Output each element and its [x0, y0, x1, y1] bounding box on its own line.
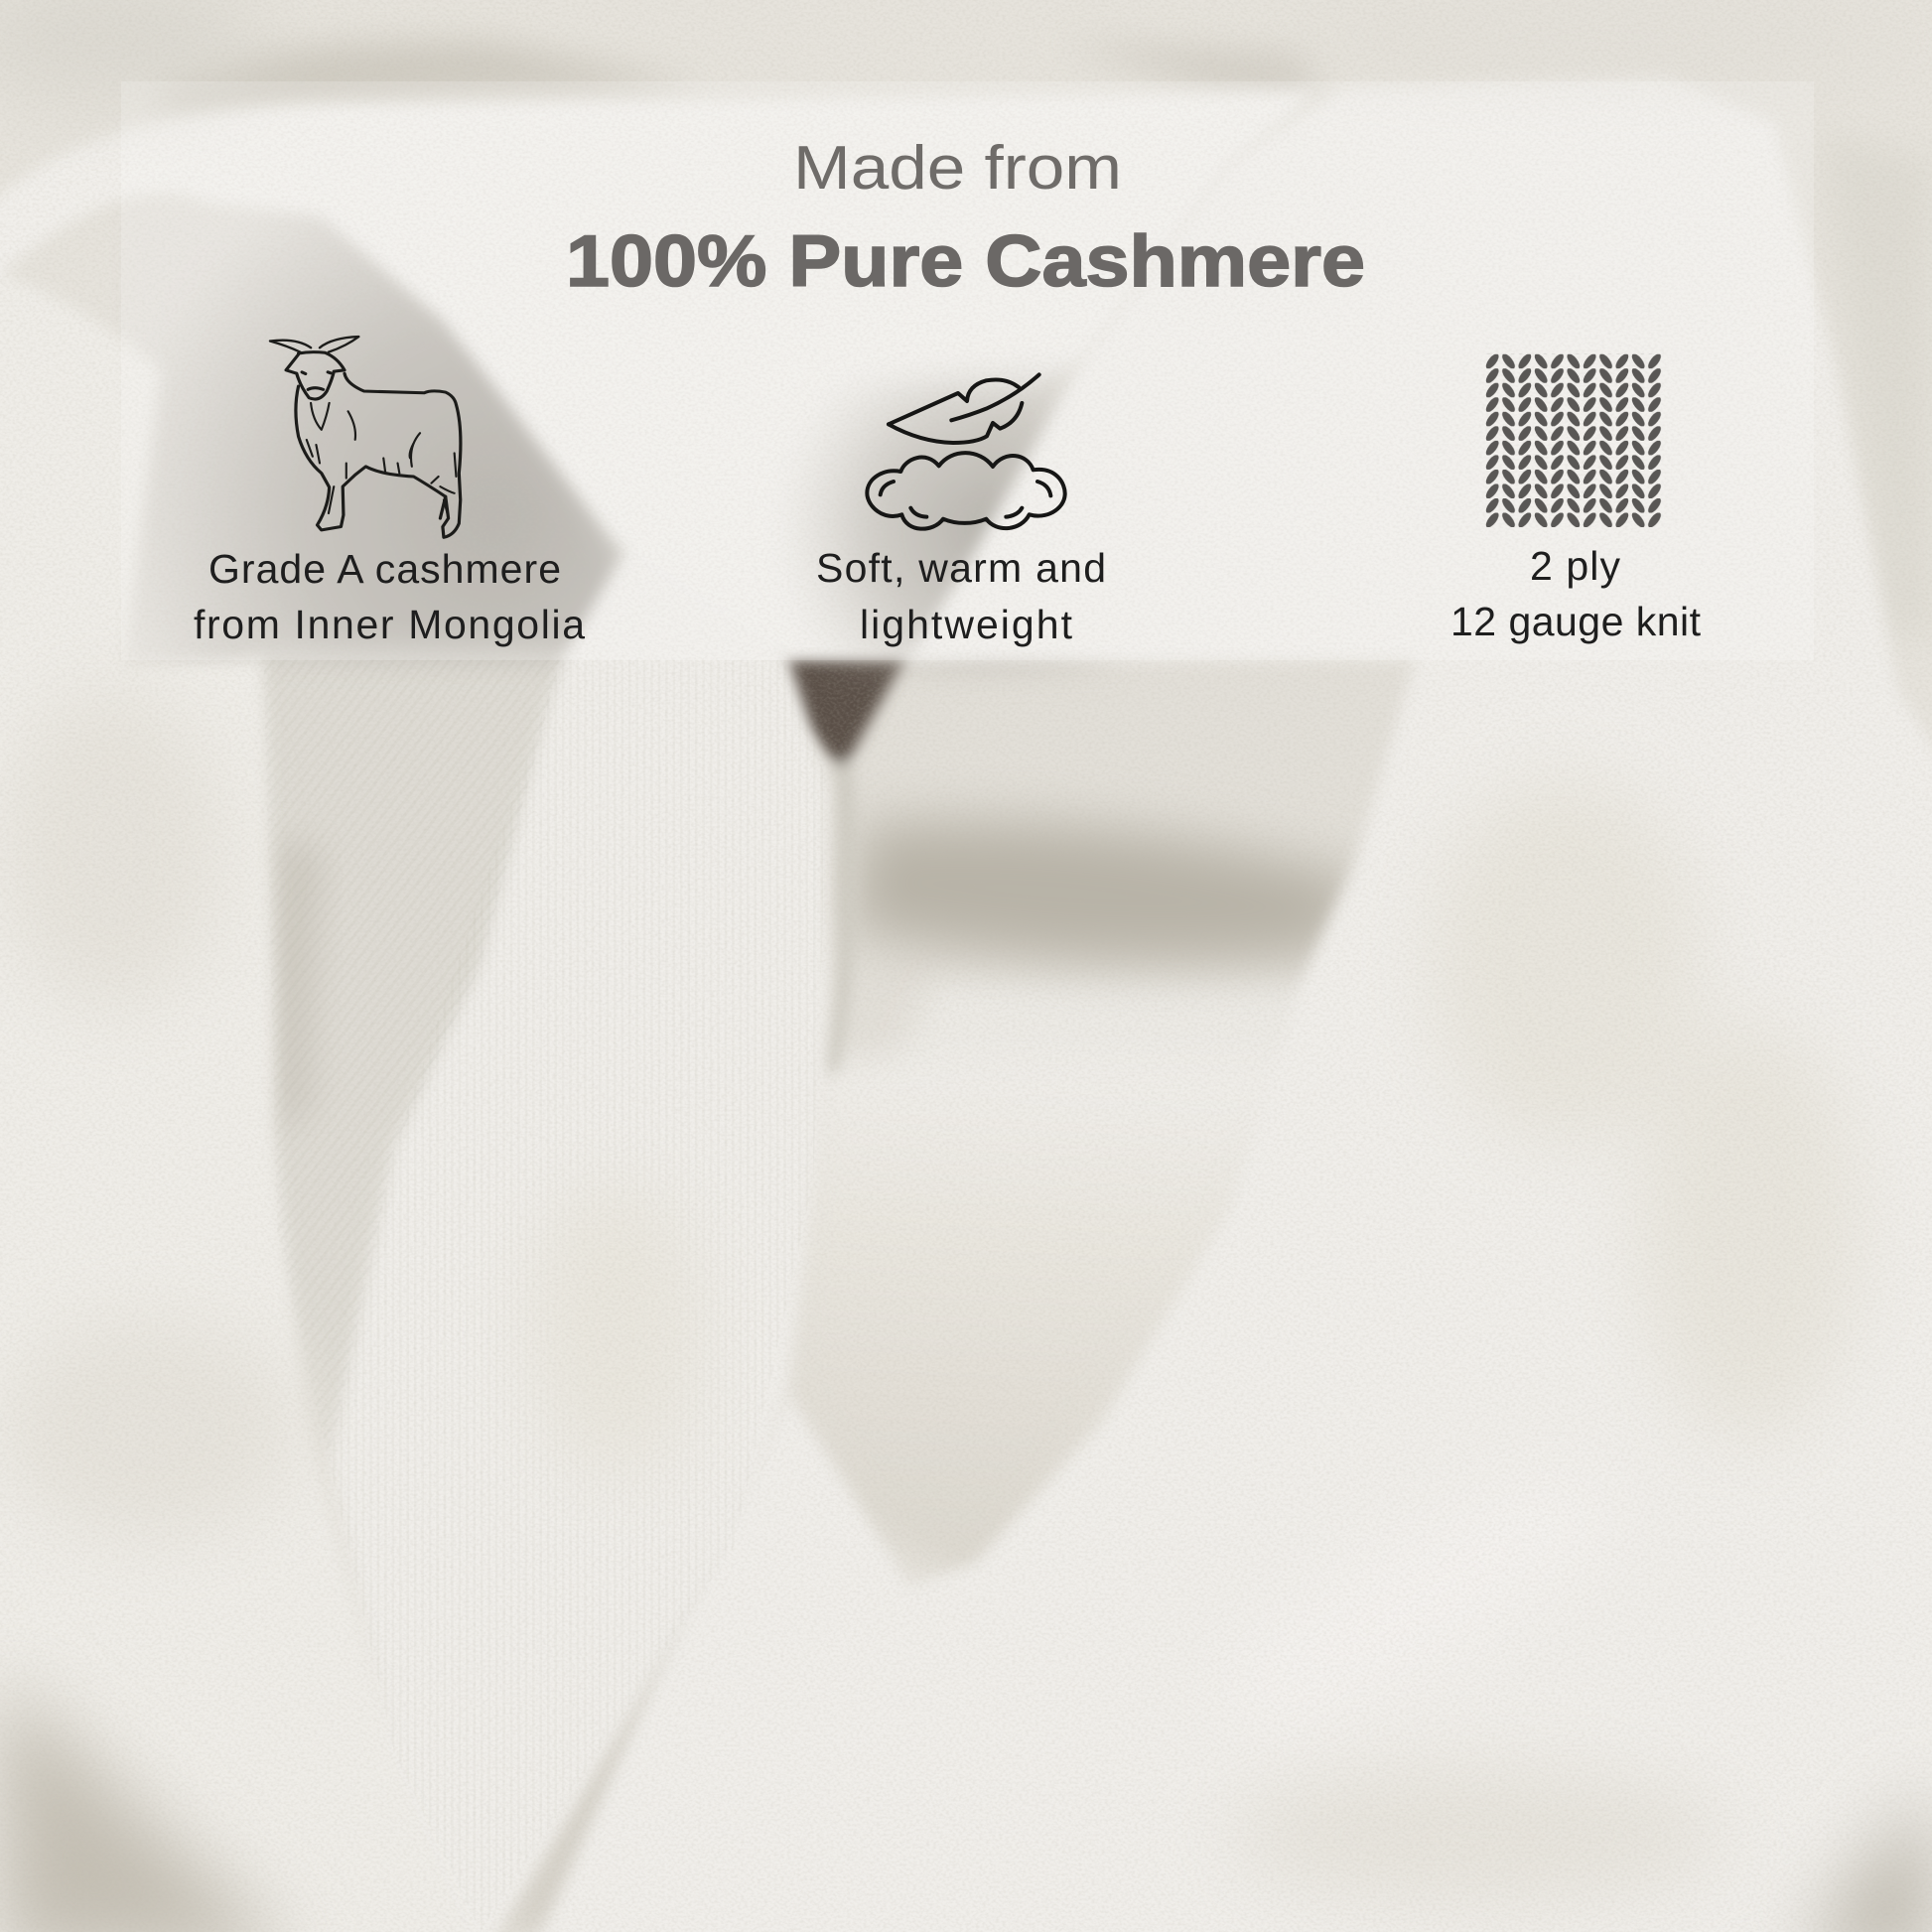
label: 2 ply 12 gauge knit: 12 gauge knit	[1450, 599, 1702, 644]
icon: knit stitch swatch	[1484, 354, 1663, 527]
panel: translucent header band	[121, 81, 1814, 660]
label: Soft, warm and lightweight: lightweight	[860, 602, 1073, 647]
label: Grade A cashmere from Inner Mongolia: from Inner Mongolia	[194, 602, 585, 647]
left big fold	[0, 265, 481, 1932]
label: Soft, warm and lightweight: Soft, warm and	[816, 545, 1106, 591]
label: Soft, warm and lightweight	[816, 545, 1106, 647]
shade under upper-right collar	[740, 369, 1109, 665]
top collar	[0, 92, 1318, 659]
icon: feather above cloud	[867, 374, 1065, 529]
label: 2 ply 12 gauge knit: 2 ply	[1530, 543, 1620, 589]
heading: 100% Pure Cashmere: 100% Pure Cashmere	[566, 221, 1365, 302]
lit folds	[0, 92, 1318, 1932]
upper pocket shadow band	[850, 822, 1368, 963]
big right fold	[530, 73, 1932, 1932]
title: Made from: Made from	[793, 134, 1122, 203]
label: Grade A cashmere from Inner Mongolia	[194, 546, 585, 647]
label: 2 ply 12 gauge knit	[1450, 543, 1702, 644]
centre rib fold	[329, 548, 828, 1932]
icon: goat	[270, 337, 461, 537]
label: Grade A cashmere from Inner Mongolia: Grade A cashmere	[208, 546, 561, 592]
